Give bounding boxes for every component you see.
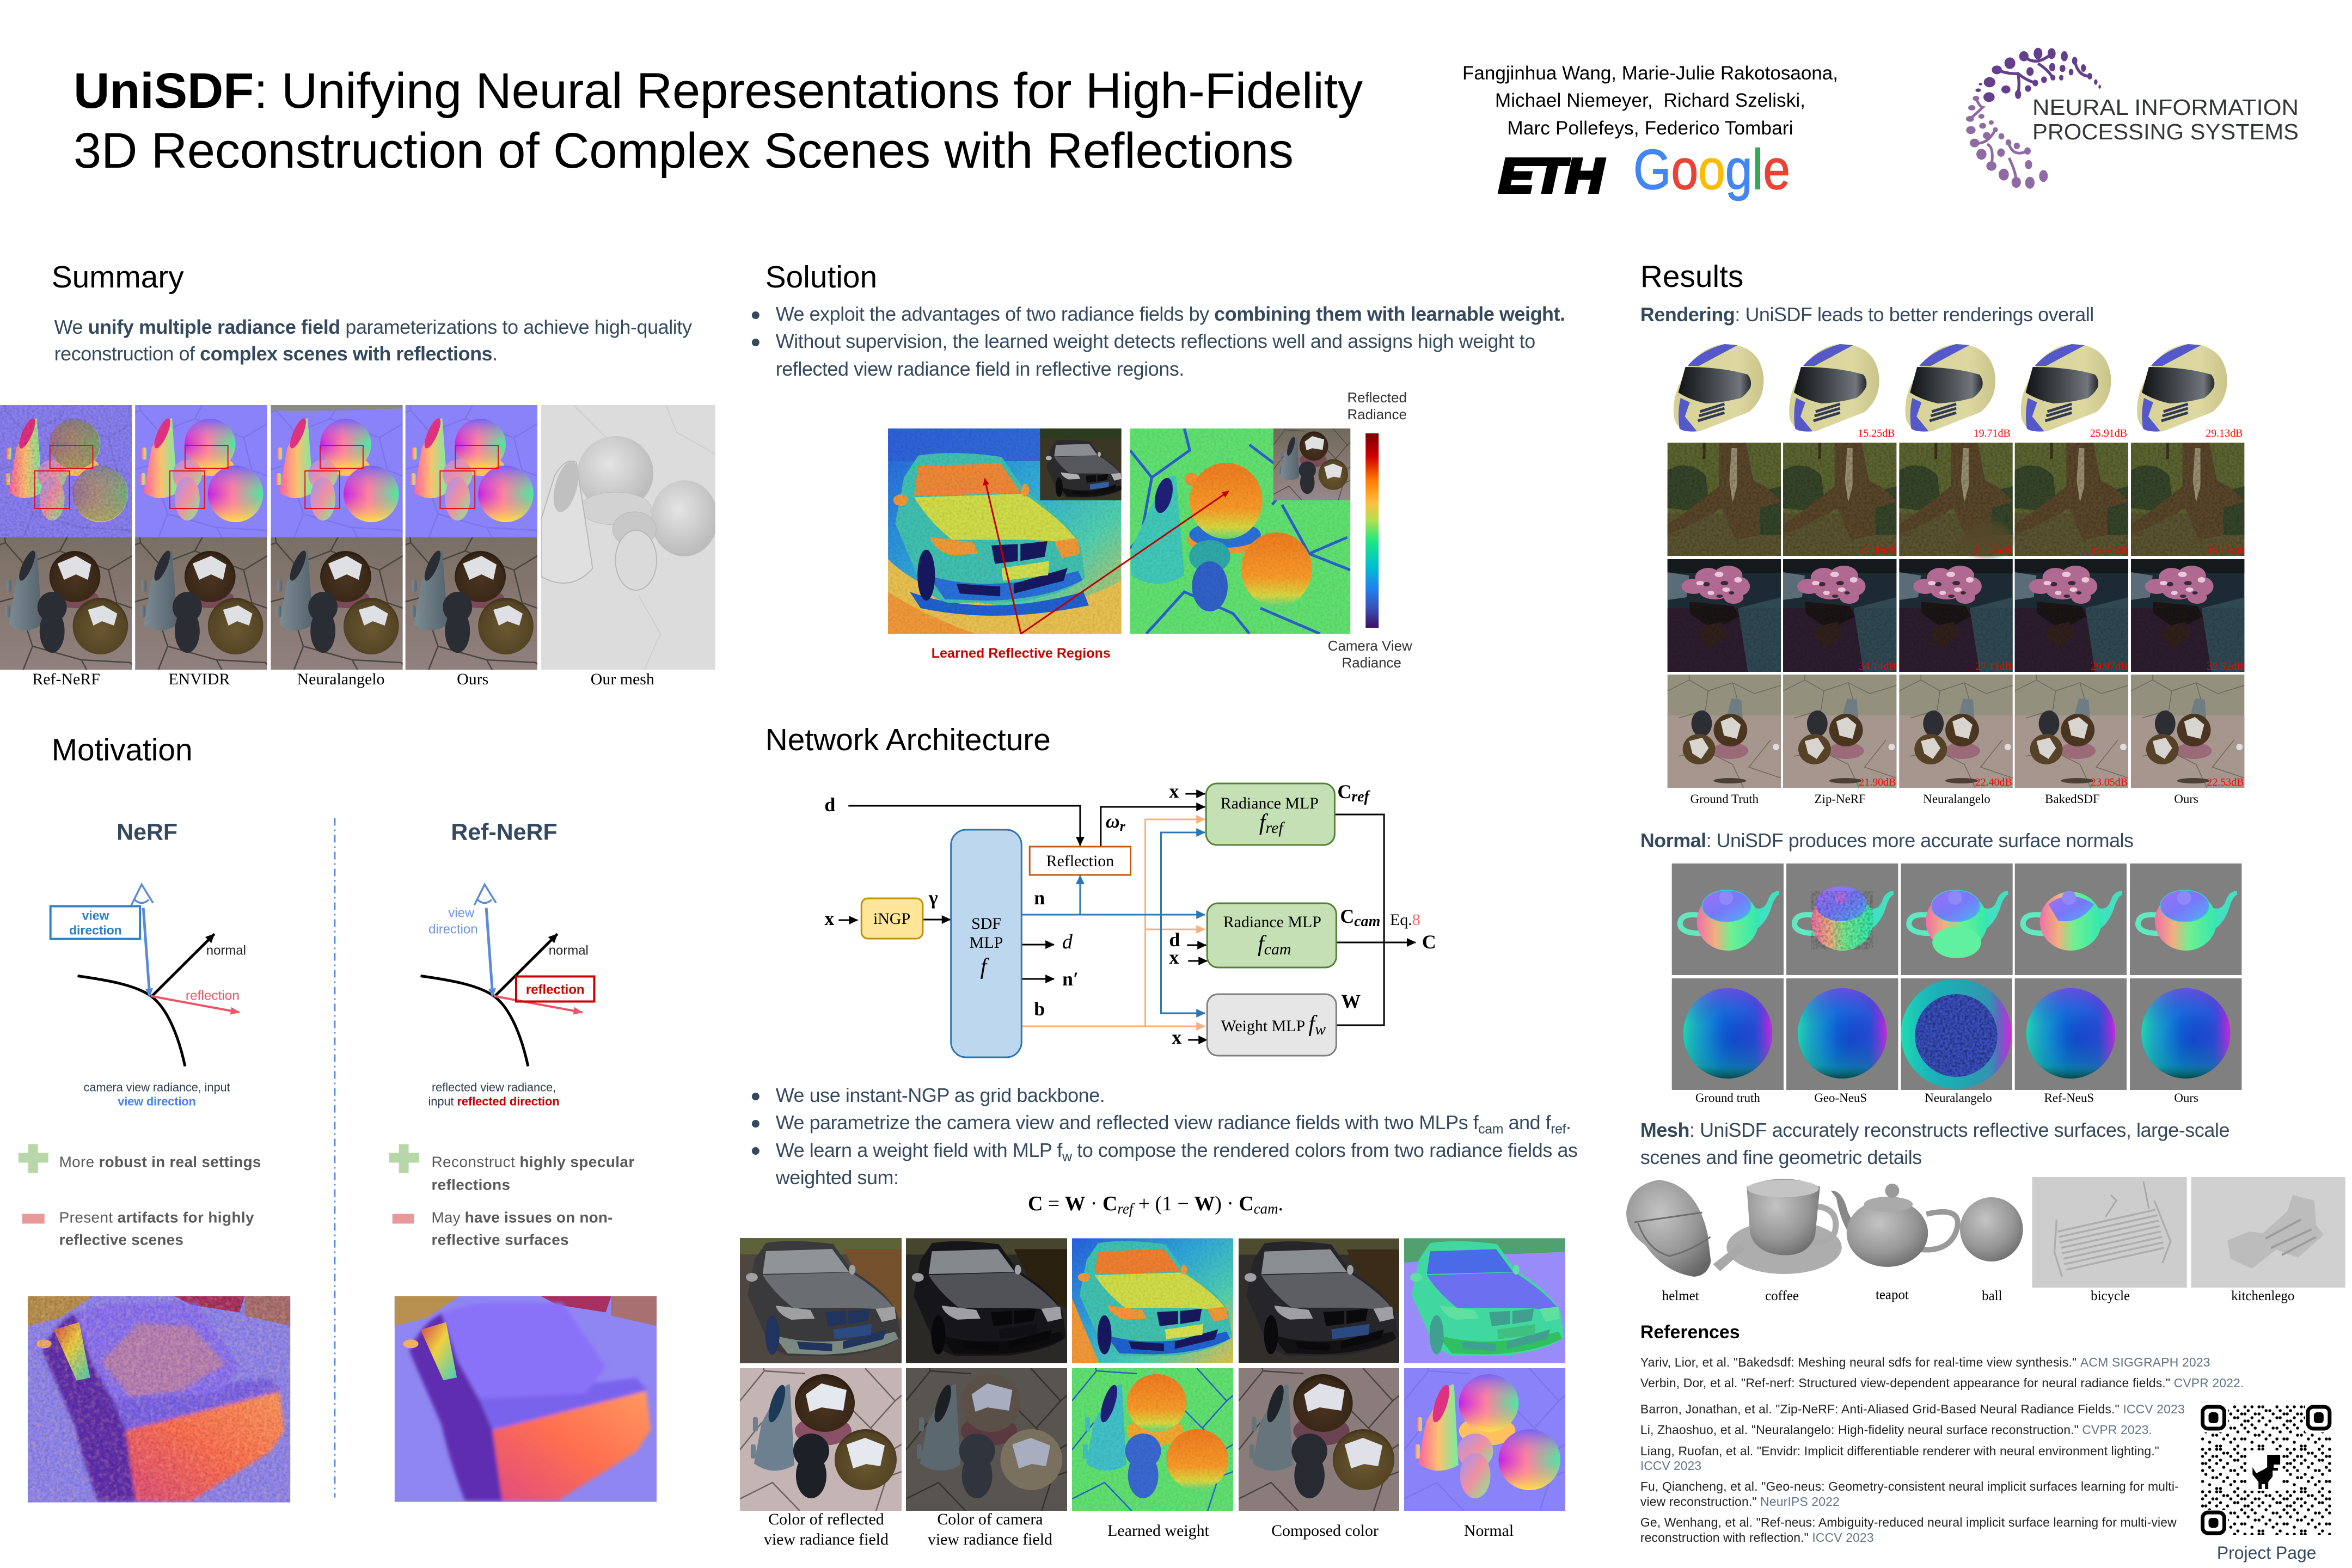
teapot: ground truth [1672, 863, 1784, 975]
heading: Results: Results [1640, 259, 1743, 294]
captions: mesh: helmet [1662, 1289, 1699, 1303]
colorbar: Reflected [1347, 390, 1407, 406]
captions: normal [1695, 1091, 2198, 1105]
image: composed color balls [1239, 1363, 1399, 1511]
captions: normal: Ground truth [1695, 1091, 1760, 1105]
diagram labels: b [1034, 998, 1045, 1020]
box: Radiance MLP f_cam [1207, 903, 1336, 967]
formula: . [1278, 1192, 1283, 1215]
pro: Ref-NeRF: Reconstruct highly specular [431, 1153, 634, 1171]
sphere: Neuralangelo [1901, 978, 2012, 1090]
diagram: NeRF rays [51, 884, 246, 1066]
diagram labels: r [1120, 818, 1126, 834]
summary text: We unify multiple radiance field parameterizations to achieve high-quality [54, 316, 692, 338]
diagram: Ref-NeRF rays: normal [549, 943, 589, 958]
con: NeRF: Present artifacts for highly [59, 1209, 254, 1226]
architecture bullets: w [1062, 1149, 1073, 1165]
caption: NeRF diagram: view direction [118, 1094, 196, 1108]
box: iNGP [861, 898, 923, 939]
diagram labels: cam [1354, 913, 1380, 930]
captions: decomposition: Learned weight [1107, 1522, 1210, 1540]
box: iNGP: iNGP [873, 910, 910, 928]
captions: summary: Neuralangelo [297, 670, 384, 688]
logo: ETH: ETH [1499, 149, 1605, 203]
box: Weight MLP: Weight MLP f [1221, 1012, 1315, 1037]
panel: summary comparison images [0, 362, 718, 722]
captions: mesh [1662, 1288, 2294, 1303]
callout: learned reflective regions: Learned Reflective Regions [932, 646, 1111, 661]
teapot: Ref-NeuS [2015, 863, 2127, 975]
caption: NeRF diagram: camera view radiance, input [84, 1080, 230, 1094]
diagram labels: d [1169, 929, 1180, 951]
subheading: Mesh [1640, 1119, 2230, 1168]
image: learned weight balls [1072, 1363, 1233, 1511]
diagram labels: C [1422, 931, 1436, 953]
mesh: teapot [1831, 1184, 1958, 1267]
diagram labels: x [824, 908, 834, 929]
captions: decomposition: Normal [1464, 1522, 1514, 1540]
pro: NeRF [19, 1144, 261, 1173]
caption: Ref-NeRF diagram [428, 1080, 560, 1108]
sphere: Geo-NeuS [1786, 978, 1898, 1090]
image: learned weight car [1072, 1238, 1233, 1363]
row: garden: 22.40dB [1975, 776, 2012, 788]
captions: rendering [1690, 792, 2198, 806]
solution bullets: We exploit the advantages of two radiance fields by combining them with learnable weight. [776, 303, 1565, 325]
image: learned weight on car [888, 428, 1124, 634]
diagram labels: d [1062, 930, 1073, 953]
image: camera color car [906, 1238, 1067, 1363]
architecture bullets: to compose the rendered colors from two radiance fields as [1072, 1139, 1578, 1161]
image: Ours normals [362, 362, 590, 590]
pro: NeRF: More robust in real settings [59, 1153, 261, 1171]
box: SDF MLP: SDF [971, 915, 1001, 933]
diagram: Ref-NeRF rays [421, 884, 594, 1066]
sphere: ground truth [1672, 978, 1784, 1090]
label: project page: Project Page [2217, 1543, 2316, 1563]
diagram: Ref-NeRF rays: reflection [526, 982, 585, 997]
mesh: helmet [1626, 1180, 1711, 1277]
captions: summary: Ref-NeRF [32, 670, 100, 688]
references list: Liang, Ruofan, et al. "Envidr: Implicit differentiable renderer with neural environment lighting." [1640, 1444, 2159, 1458]
captions: summary: Our mesh [591, 670, 654, 688]
diagram labels: n [1034, 887, 1045, 909]
row: stump: 26.17dB [2207, 544, 2244, 556]
diagram labels: W [1341, 990, 1361, 1012]
formula: C = W · C [1028, 1192, 1117, 1215]
row: bonsai: 34.14dB [1859, 660, 1896, 672]
image: Ref-NeRF normals [0, 362, 185, 590]
column: middle [740, 260, 1578, 1548]
sphere: Ours [2130, 978, 2241, 1090]
architecture bullets: ref [1551, 1122, 1566, 1137]
logo: NeurIPS [1966, 48, 2299, 189]
diagram: NeRF rays: reflection [186, 988, 240, 1003]
box: Radiance MLP f_cam: f [1258, 932, 1264, 957]
panel: Ref-NeRF [389, 819, 657, 1502]
authors: Michael Niemeyer, Richard Szeliski, [1495, 90, 1805, 111]
image: our mesh [541, 405, 715, 670]
captions: mesh: coffee [1765, 1289, 1799, 1303]
box: Radiance MLP f_cam: cam [1264, 940, 1291, 958]
colorbar: Radiance [1347, 407, 1407, 422]
architecture bullets: and f [1503, 1111, 1552, 1134]
solution bullets: reflected view radiance field in reflective regions. [776, 358, 1184, 380]
row: bonsai: 27.11dB [1975, 660, 2012, 672]
diagram labels [824, 780, 1436, 1048]
box: Reflection: Reflection [1046, 852, 1114, 870]
diagram: NeRF rays: direction [69, 923, 122, 938]
logo: NeurIPS: NEURAL INFORMATION [2032, 95, 2299, 120]
formula: cam [1254, 1200, 1278, 1217]
con: NeRF: reflective scenes [59, 1231, 183, 1248]
heading: Motivation: Motivation [52, 732, 193, 768]
image: normal balls [1404, 1363, 1565, 1511]
references list: Li, Zhaoshuo, et al. "Neuralangelo: High-fidelity neural surface reconstruction." CVPR 2023. [1640, 1423, 2152, 1437]
section: Motivation [19, 732, 657, 1503]
diagram labels: γ [928, 887, 938, 909]
references list: Barron, Jonathan, et al. "Zip-NeRF: Anti-Aliased Grid-Based Neural Radiance Fields." ICCV 2023 [1640, 1402, 2185, 1416]
QR code: project page [2200, 1404, 2332, 1536]
teapot: Ours [2130, 863, 2241, 975]
colorbar: Radiance [1342, 656, 1401, 671]
captions: decomposition: Composed color [1271, 1522, 1379, 1540]
diagram: NeRF rays: normal [206, 943, 246, 958]
image: reflected color balls [740, 1368, 902, 1511]
authors: Marc Pollefeys, Federico Tombari [1507, 118, 1793, 139]
row: garden: 21.90dB [1859, 776, 1896, 788]
box: SDF MLP: MLP [970, 934, 1003, 952]
box: Radiance MLP f_ref: ref [1266, 819, 1285, 837]
heading: NeRF: NeRF [117, 819, 177, 846]
row: bonsai [1668, 559, 2244, 672]
formula: ref [1117, 1200, 1135, 1217]
captions: decomposition: view radiance field [928, 1530, 1052, 1548]
pro: Ref-NeRF [389, 1144, 634, 1193]
captions: mesh: ball [1982, 1289, 2002, 1303]
captions: summary: Ours [457, 670, 488, 688]
panel: rendering comparison grid [1668, 344, 2244, 788]
diagram labels: x [1169, 780, 1179, 802]
captions: decomposition: Color of camera [937, 1510, 1043, 1528]
caption: Ref-NeRF diagram: input reflected direction [428, 1094, 560, 1108]
summary text [54, 316, 692, 365]
subheading: Rendering: Rendering: UniSDF leads to better renderings overall [1640, 303, 2094, 326]
architecture bullets: We parametrize the camera view and reflected view radiance fields with two MLPs f [776, 1111, 1479, 1134]
caption: NeRF diagram [84, 1080, 230, 1108]
references list: Verbin, Dor, et al. "Ref-nerf: Structured view-dependent appearance for neural radiance fields." CVPR 2022. [1640, 1376, 2244, 1390]
box: Radiance MLP f_cam: Radiance MLP [1223, 913, 1321, 931]
heading: Network Architecture: Network Architecture [765, 722, 1051, 757]
row: garden [1668, 675, 2244, 788]
row: garden: 23.05dB [2091, 776, 2128, 788]
subheading: Mesh: Mesh: UniSDF accurately reconstructs reflective surfaces, large-scale [1640, 1119, 2230, 1141]
callout: learned reflective regions [932, 479, 1229, 661]
diagram: Ref-NeRF rays: direction [428, 922, 478, 937]
heading: Ref-NeRF: Ref-NeRF [451, 819, 558, 846]
column: right [1626, 259, 2345, 1563]
title: UniSDF: Unifying Neural Representations for High-Fidelity [74, 63, 1363, 119]
box: Radiance MLP f_ref [1206, 783, 1334, 845]
pro: Ref-NeRF: reflections [431, 1176, 510, 1193]
image: Ref-NeRF car normals [394, 1296, 657, 1502]
row: bonsai: 32.52dB [2207, 660, 2244, 672]
con: Ref-NeRF: reflective surfaces [431, 1231, 569, 1248]
image: photo row [0, 494, 590, 722]
captions: normal: Ours [2174, 1091, 2198, 1105]
diagram labels: d [824, 794, 835, 816]
captions: rendering: BakedSDF [2045, 792, 2100, 806]
box: Weight MLP [1207, 994, 1336, 1056]
box: SDF MLP [951, 830, 1021, 1057]
panel: normal comparison grid [1672, 863, 2241, 1090]
captions: mesh: teapot [1876, 1288, 1909, 1302]
row: helmet: 29.13dB [2206, 427, 2243, 439]
panel: decomposition images [740, 1238, 1565, 1511]
captions: rendering: Ours [2174, 792, 2198, 806]
architecture bullets: cam [1478, 1122, 1504, 1137]
authors: Fangjinhua Wang, Marie-Julie Rakotosaona, [1462, 63, 1838, 84]
architecture bullets: We learn a weight field with MLP f [776, 1139, 1062, 1161]
con: NeRF [22, 1209, 254, 1248]
authors [1462, 63, 1838, 139]
diagram labels: x [1172, 1026, 1181, 1048]
summary text: reconstruction of complex scenes with reflections. [54, 342, 498, 365]
captions: summary: ENVIDR [168, 670, 230, 688]
row: helmet: 19.71dB [1974, 427, 2011, 439]
captions: rendering: Zip-NeRF [1815, 792, 1866, 806]
image: NeRF car normals [27, 1296, 291, 1503]
row: helmet [1668, 344, 2244, 439]
colorbar: Camera View [1328, 639, 1412, 654]
architecture bullets: weighted sum: [775, 1166, 899, 1189]
solution bullets [752, 303, 1565, 380]
architecture bullets: We use instant-NGP as grid backbone. [776, 1084, 1105, 1106]
references list: Yariv, Lior, et al. "Bakedsdf: Meshing neural sdfs for real-time view synthesis." ACM SIGGRAPH 2023 [1640, 1355, 2210, 1369]
panel: NeRF [19, 819, 290, 1503]
captions: rendering: Neuralangelo [1923, 792, 1990, 806]
sphere: Ref-NeuS [2015, 978, 2127, 1090]
row: stump: 23.64dB [2091, 544, 2128, 556]
image: normal car [1404, 1238, 1565, 1363]
diagram labels: ω [1106, 810, 1120, 832]
box: Radiance MLP f_ref: f [1259, 810, 1266, 835]
references list [1640, 1355, 2244, 1545]
references list: reconstruction with reflection." ICCV 2023 [1640, 1530, 1874, 1545]
title: 3D Reconstruction of Complex Scenes with Reflections [74, 123, 1294, 179]
box: SDF MLP: f [981, 954, 990, 979]
references list: ICCV 2023 [1640, 1459, 1701, 1473]
teapot: Geo-NeuS [1786, 863, 1898, 975]
image: camera color balls [906, 1363, 1067, 1511]
logo: Google: Google [1633, 138, 1790, 201]
formula: + (1 − [1133, 1192, 1194, 1215]
captions: normal: Ref-NeuS [2044, 1091, 2094, 1105]
captions: mesh: kitchenlego [2231, 1289, 2294, 1303]
captions: mesh: bicycle [2091, 1289, 2130, 1303]
box: Radiance MLP f_ref: Radiance MLP [1221, 794, 1319, 812]
con: Ref-NeRF: May have issues on non- [431, 1209, 612, 1226]
mesh: bicycle [2032, 1177, 2187, 1288]
diagram labels: x [1169, 946, 1179, 968]
title [74, 63, 1363, 179]
references list: view reconstruction." NeurIPS 2022 [1640, 1494, 1840, 1509]
architecture bullets: . [1566, 1111, 1571, 1134]
row: bonsai: 29.97dB [2091, 660, 2128, 672]
caption: Ref-NeRF diagram: reflected view radiance, [432, 1080, 556, 1094]
panel: meshes [1626, 1177, 2345, 1288]
captions: summary [32, 670, 654, 688]
heading: Summary: Summary [52, 260, 184, 295]
captions: decomposition: view radiance field [764, 1530, 889, 1548]
row: helmet: 25.91dB [2090, 427, 2127, 439]
column: left [0, 260, 718, 1503]
diagram labels: C [1340, 905, 1354, 927]
heading: Solution: Solution [765, 260, 877, 295]
box: Reflection [1030, 847, 1131, 875]
diagram labels: n′ [1062, 968, 1079, 990]
teapot: Neuralangelo [1901, 863, 2013, 975]
row: stump: 21.65dB [1975, 544, 2012, 556]
row: garden: 22.53dB [2207, 776, 2244, 788]
row: stump [1668, 443, 2244, 556]
mesh: coffee [1713, 1179, 1842, 1274]
logo: NeurIPS: PROCESSING SYSTEMS [2032, 119, 2299, 144]
references list: Fu, Qiancheng, et al. "Geo-neus: Geometry-consistent neural implicit surfaces learning for multi- [1640, 1479, 2179, 1493]
row: stump: 27.30dB [1859, 544, 1896, 556]
captions: rendering: Ground Truth [1690, 792, 1759, 806]
image: ENVIDR normals [91, 362, 320, 590]
heading: References: References [1640, 1322, 1740, 1343]
image: Neuralangelo normals [228, 362, 455, 590]
diagram labels: ref [1351, 788, 1371, 805]
mesh: ball [1960, 1197, 2023, 1261]
colorbar [1328, 390, 1412, 671]
captions: normal: Neuralangelo [1925, 1091, 1992, 1105]
image: reflected color car [740, 1238, 902, 1363]
subheading: Normal: Normal: UniSDF produces more accurate surface normals [1640, 829, 2134, 852]
captions: decomposition: Color of reflected [768, 1510, 884, 1528]
diagram labels: Eq.8 [1390, 911, 1420, 929]
box: Weight MLP: w [1315, 1020, 1326, 1038]
con: Ref-NeRF [393, 1209, 612, 1248]
subheading: Mesh: scenes and fine geometric details [1640, 1146, 1922, 1168]
divider [334, 818, 335, 1497]
captions: decomposition [764, 1510, 1514, 1548]
row: helmet: 15.25dB [1858, 427, 1895, 439]
diagram labels: C [1337, 781, 1351, 803]
diagram: network architecture [824, 780, 1436, 1057]
diagram: Ref-NeRF rays: view [448, 905, 475, 921]
architecture bullets [752, 1084, 1578, 1189]
captions: normal: Geo-NeuS [1814, 1091, 1867, 1105]
references list: Ge, Wenhang, et al. "Ref-neus: Ambiguity-reduced neural implicit surface learning for multi-view [1640, 1515, 2177, 1529]
image: learned weight on balls [1130, 426, 1350, 634]
mesh: kitchenlego [2191, 1177, 2345, 1288]
formula: W) · C [1194, 1192, 1254, 1215]
solution bullets: Without supervision, the learned weight detects reflections well and assigns high weight to [776, 330, 1535, 352]
image: composed color car [1239, 1238, 1399, 1363]
diagram: NeRF rays: view [82, 908, 109, 923]
